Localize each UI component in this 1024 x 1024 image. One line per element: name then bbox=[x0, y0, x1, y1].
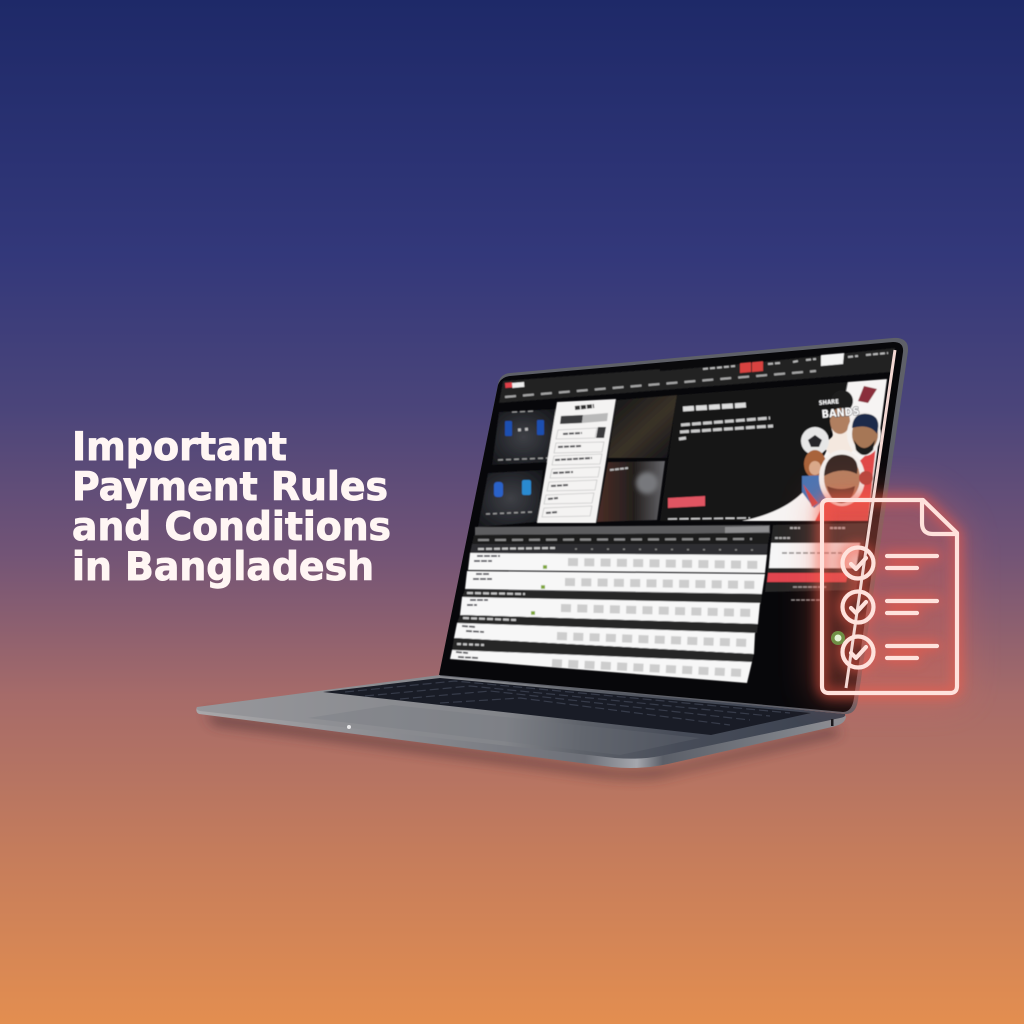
screen content bbox=[450, 348, 895, 683]
front edge bbox=[196, 707, 846, 768]
webcam notch bbox=[660, 355, 760, 371]
camera status light bbox=[831, 631, 845, 645]
promo photo bottom bbox=[597, 461, 665, 522]
slip heading bbox=[775, 528, 846, 538]
trackpad bbox=[308, 705, 700, 755]
title: Important bbox=[72, 425, 287, 470]
place bet button bbox=[767, 573, 848, 582]
form fields bbox=[542, 428, 604, 517]
football bbox=[801, 427, 829, 455]
document glow haze bbox=[822, 500, 957, 693]
page fold bbox=[922, 501, 956, 534]
document outline bbox=[822, 500, 957, 693]
slip box bbox=[769, 543, 860, 568]
deck surface bbox=[197, 675, 845, 759]
row 2 bbox=[465, 571, 765, 594]
hero button bbox=[668, 496, 705, 508]
laptop base bbox=[196, 675, 846, 768]
badge bbox=[859, 471, 873, 485]
band 3 bbox=[457, 615, 758, 633]
keyboard bbox=[323, 678, 811, 735]
login and register buttons bbox=[740, 361, 763, 373]
player: top bbox=[822, 390, 862, 462]
check item 3 bbox=[842, 636, 937, 668]
login panel bbox=[537, 399, 616, 523]
sports tile bottom bbox=[478, 470, 543, 527]
promo wordmark bbox=[819, 398, 860, 421]
hero copy bbox=[679, 418, 773, 439]
black bezel bbox=[439, 342, 903, 712]
band 1 bbox=[470, 544, 768, 555]
title bbox=[72, 425, 391, 590]
logo bbox=[505, 382, 524, 388]
title: Payment Rules bbox=[72, 465, 388, 510]
front notch bbox=[347, 725, 351, 729]
promo wordmark: SHARE bbox=[819, 398, 839, 407]
row 5 bbox=[450, 650, 752, 683]
laptop shadow bbox=[205, 714, 840, 778]
title: in Bangladesh bbox=[72, 545, 374, 590]
laptop bbox=[196, 338, 908, 778]
icon: glowing checklist document bbox=[822, 350, 957, 693]
player: right bbox=[847, 412, 881, 456]
phone button bbox=[596, 427, 606, 438]
header labels bbox=[703, 353, 888, 369]
row 3 bbox=[460, 597, 760, 624]
sports tabs bbox=[472, 533, 770, 544]
key rows bbox=[345, 681, 790, 725]
laptop lid bbox=[440, 338, 908, 714]
slider dots bbox=[668, 518, 750, 519]
panel tabs bbox=[560, 415, 583, 424]
check item 2 bbox=[842, 592, 937, 622]
sports tile top bbox=[492, 409, 555, 465]
red corner bbox=[815, 445, 876, 521]
promo wordmark: BANDS bbox=[821, 405, 860, 421]
band 2 bbox=[462, 590, 762, 604]
live markers bbox=[531, 567, 547, 613]
hero banner bbox=[660, 379, 887, 521]
lid right edge highlight bbox=[846, 350, 895, 688]
site header bbox=[499, 348, 895, 403]
slip footnotes bbox=[791, 587, 826, 600]
hero heading bbox=[683, 405, 746, 409]
player: curly bbox=[802, 450, 828, 508]
flag shape bbox=[858, 386, 877, 403]
title: and Conditions bbox=[72, 505, 391, 550]
hero white swoop bbox=[742, 379, 887, 521]
match names bbox=[456, 556, 500, 658]
player: centre bbox=[819, 450, 865, 506]
betting table bbox=[450, 525, 770, 683]
row 1 bbox=[468, 553, 767, 573]
row 4 bbox=[454, 623, 755, 654]
odds cells bbox=[552, 562, 763, 673]
table title bar bbox=[475, 525, 770, 535]
check item 1 bbox=[842, 548, 937, 578]
panel heading bbox=[575, 406, 594, 408]
bet slip panel bbox=[765, 523, 868, 600]
band 4 bbox=[452, 638, 754, 662]
document red halo bbox=[822, 500, 957, 693]
side port bbox=[831, 719, 834, 726]
nav labels bbox=[505, 371, 816, 397]
field labels bbox=[546, 433, 592, 513]
promo photo top bbox=[608, 395, 677, 458]
